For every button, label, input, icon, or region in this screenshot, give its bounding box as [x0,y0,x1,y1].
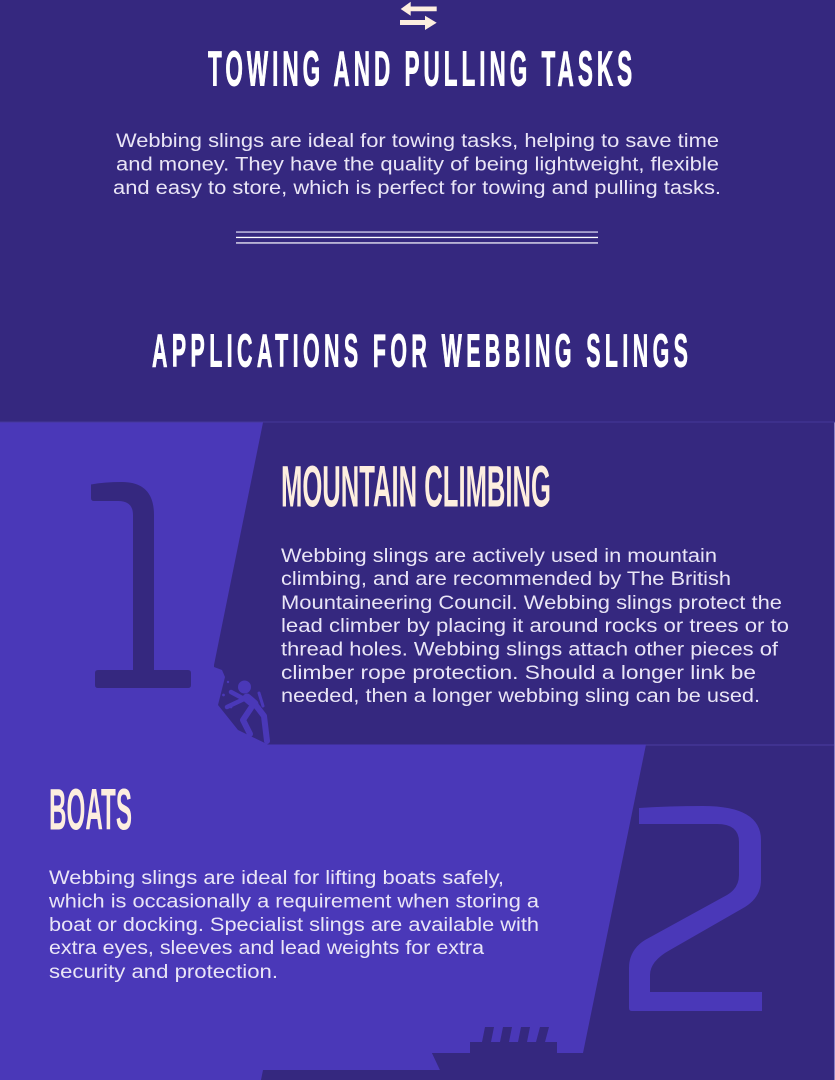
text block: boats description: boat or docking. Specialist slings are available with [49,914,539,936]
text block: mountain climbing description: lead climber by placing it around rocks or trees or to [281,615,789,637]
panel: light purple background shape [0,422,646,1080]
text block: boats description: Webbing slings are ideal for lifting boats safely, [49,867,504,889]
icon: ship silhouette [432,1027,600,1070]
text block: towing description: Webbing slings are ideal for towing tasks, helping to save time [116,130,719,152]
text block: boats description: which is occasionally a requirement when storing a [48,890,539,912]
text block: boats description: security and protection. [49,961,278,983]
text block: boats description [48,867,539,983]
text: BOATS [49,778,132,842]
text block: mountain climbing description: Mountaineering Council. Webbing slings protect the [281,592,782,614]
text block: towing description: and money. They have the quality of being lightweight, flexible [116,154,719,176]
icon: climber [222,680,267,741]
text block: mountain climbing description: Webbing slings are actively used in mountain [281,545,717,567]
text block: mountain climbing description: thread holes. Webbing slings attach other pieces of [281,638,779,660]
numeral 2 [629,806,762,1011]
text block: boats description: extra eyes, sleeves and lead weights for extra [49,937,484,959]
text block: mountain climbing description: climber rope protection. Should a longer link be [281,662,756,684]
heading: applications for webbing slings: APPLICATIONS FOR WEBBING SLINGS [152,324,688,377]
text block: towing description [113,130,721,199]
text block: mountain climbing description: needed, then a longer webbing sling can be used. [281,685,760,707]
text block: mountain climbing description [281,545,789,707]
title: towing and pulling tasks: TOWING AND PULLING TASKS [208,42,632,97]
text block: towing description: and easy to store, which is perfect for towing and pulling tasks. [113,177,721,199]
icon: towing arrows [400,2,437,30]
text block: mountain climbing description: climbing, and are recommended by The British [281,568,731,590]
numeral 1 [91,482,191,688]
